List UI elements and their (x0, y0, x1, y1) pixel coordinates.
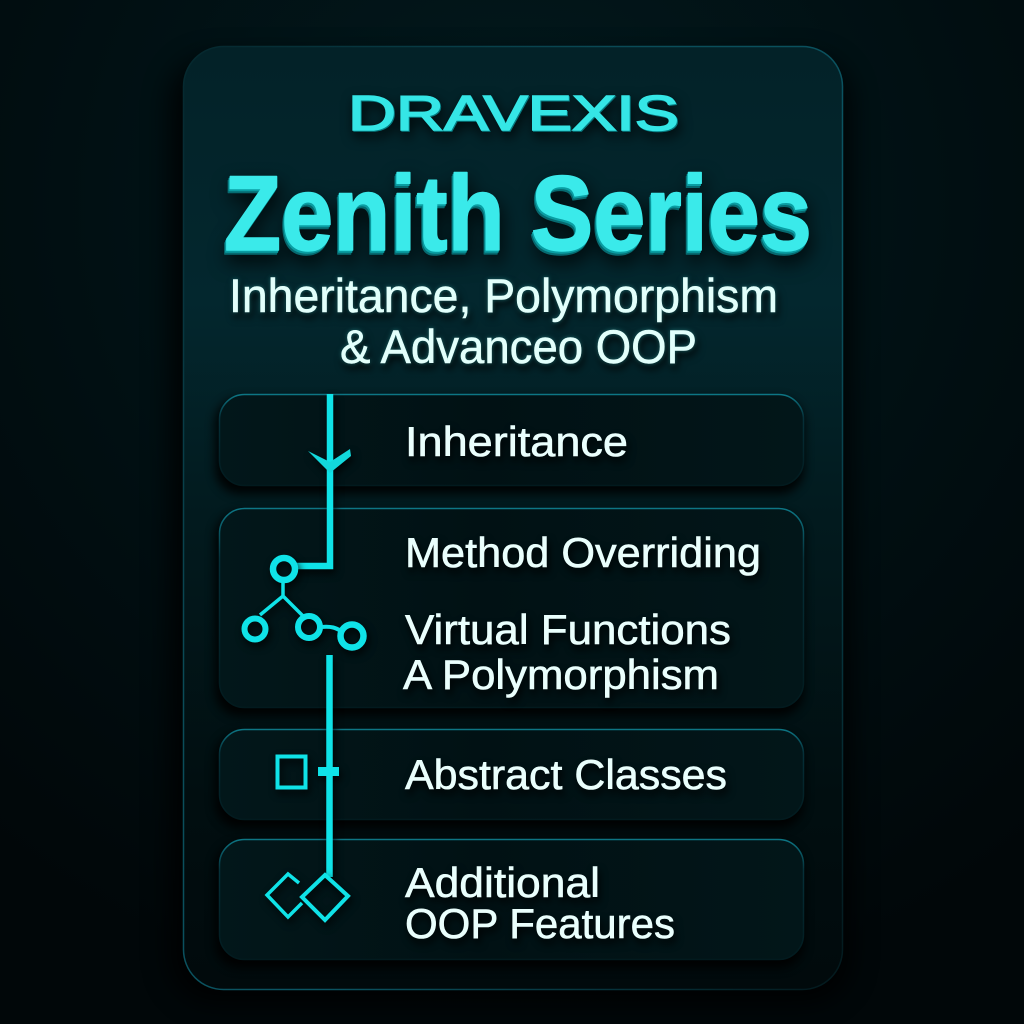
panel: inheritance row (215, 394, 804, 494)
connector line with arrow (295, 394, 351, 566)
subtitle: Inheritance, Polymorphism (229, 269, 778, 322)
icon: class hierarchy tree (244, 558, 364, 648)
panel: method overriding and virtual functions row: Method Overriding (405, 529, 761, 576)
brand name: DRAVEXIS (348, 87, 679, 141)
panel: additional OOP features row: Additional (405, 859, 600, 906)
panel: additional OOP features row (215, 840, 804, 968)
panel: method overriding and virtual functions row: Virtual Functions (405, 606, 731, 653)
connector line lower (318, 655, 339, 877)
subtitle (229, 269, 778, 373)
panel: method overriding and virtual functions row: A Polymorphism (403, 651, 719, 698)
icon: overlapping diamonds (267, 874, 348, 920)
panel: inheritance row: Inheritance (405, 418, 628, 465)
panel: additional OOP features row: OOP Features (405, 900, 675, 947)
panel: method overriding and virtual functions row (215, 508, 804, 716)
title: Zenith Series (224, 153, 812, 273)
subtitle: & Advanceo OOP (340, 320, 697, 373)
panel: abstract classes row (215, 730, 804, 828)
panel: main card (170, 46, 850, 1002)
icon: abstract class square (278, 756, 306, 788)
panel: abstract classes row: Abstract Classes (405, 751, 727, 798)
